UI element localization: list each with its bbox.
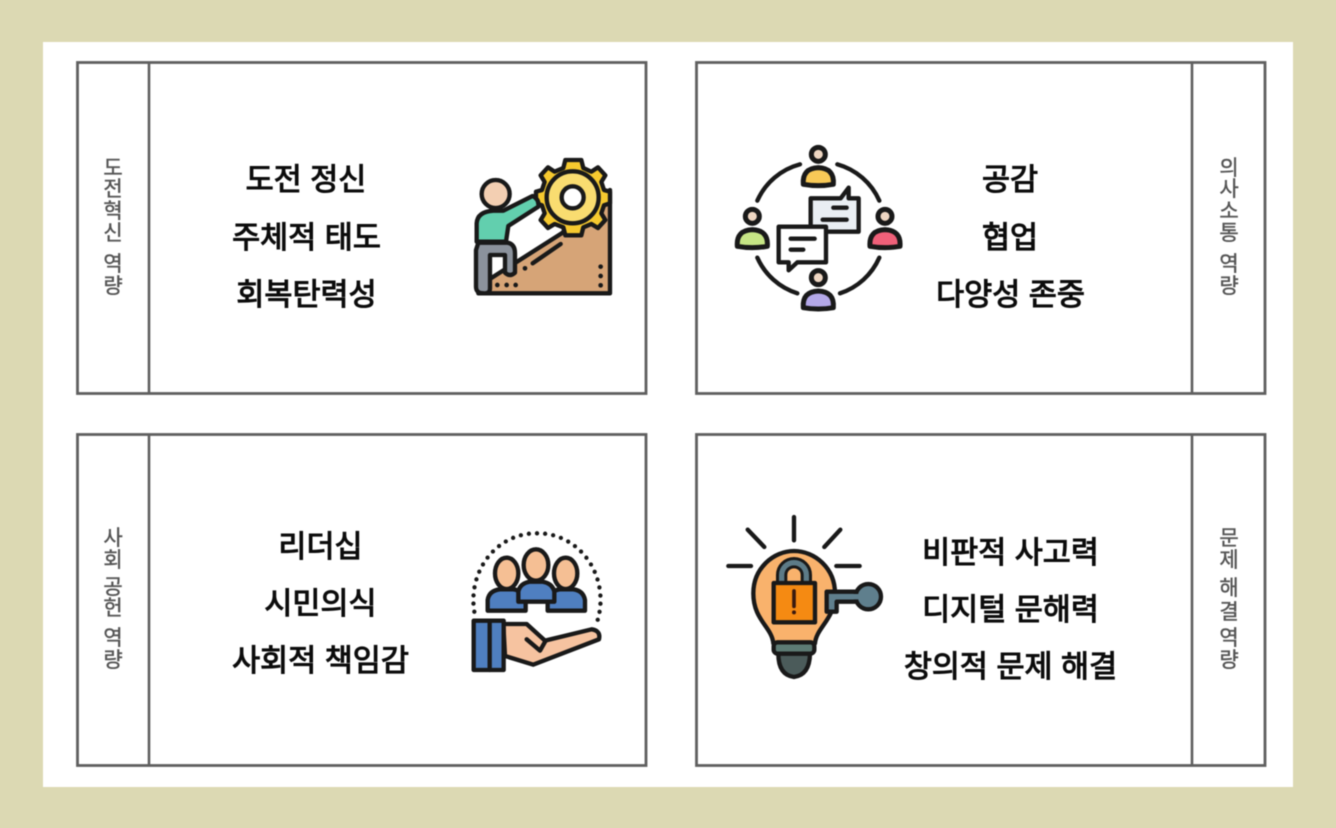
side label: 사회 공헌 역량: 량: [103, 649, 123, 672]
text block: 비판적 사고력 디지털 문해력 창의적 문제 해결: [904, 536, 1117, 684]
side label: 문제 해결 역량: 역: [1219, 627, 1239, 650]
hand: [503, 624, 599, 665]
people: [737, 147, 900, 309]
text block: 공감 협업 다양성 존중: 협업: [982, 221, 1038, 255]
text block: 리더십 시민의식 사회적 책임감: [232, 530, 409, 678]
side label: 문제 해결 역량: 해: [1219, 577, 1239, 600]
side label: 도전혁신 역량: 전: [103, 178, 123, 201]
side label: 의사소통 역량: 사: [1219, 178, 1239, 201]
side label: 의사소통 역량: 소: [1219, 200, 1239, 223]
text block: 도전 정신 주체적 태도 회복탄력성: 주체적 태도: [232, 221, 381, 255]
lock body: [774, 583, 815, 622]
side label: 사회 공헌 역량: 회: [103, 549, 123, 572]
side label: 사회 공헌 역량: 헌: [103, 597, 123, 620]
side label: 의사소통 역량: 의: [1219, 157, 1239, 180]
text block: 도전 정신 주체적 태도 회복탄력성: [232, 163, 381, 312]
side label: 문제 해결 역량: 제: [1219, 549, 1239, 572]
gear: [536, 160, 610, 235]
text block: 리더십 시민의식 사회적 책임감: 리더십: [278, 530, 363, 564]
panel: 문제 해결 역량: [696, 434, 1265, 766]
back speech bubble: [811, 188, 859, 232]
icon: hand holding people: [473, 533, 601, 670]
side label: 문제 해결 역량: 문: [1219, 527, 1239, 550]
legs: [476, 243, 515, 293]
text block: 비판적 사고력 디지털 문해력 창의적 문제 해결: 비판적 사고력: [922, 536, 1099, 570]
side label: 사회 공헌 역량: 역: [103, 627, 123, 650]
front speech bubble: [779, 227, 826, 270]
cuff: [474, 621, 504, 670]
text block: 리더십 시민의식 사회적 책임감: 시민의식: [264, 587, 377, 621]
key: [827, 584, 881, 612]
icon: climber pushing gear: [476, 160, 610, 293]
side label: 도전혁신 역량: 도: [103, 157, 123, 180]
text block: 공감 협업 다양성 존중: [936, 163, 1085, 312]
side label: 사회 공헌 역량: 공: [103, 576, 123, 599]
shackle: [782, 563, 806, 585]
text block: 도전 정신 주체적 태도 회복탄력성: 회복탄력성: [236, 278, 377, 312]
side label: 의사소통 역량: 통: [1219, 222, 1239, 245]
side people: [488, 589, 526, 611]
centre person: [518, 582, 554, 602]
text block: 공감 협업 다양성 존중: 공감: [982, 163, 1038, 197]
torso and arm: [477, 196, 538, 242]
side label: 도전혁신 역량: 역: [103, 253, 123, 276]
panel: 도전혁신 역량: [78, 62, 646, 394]
side label: 도전혁신 역량: 혁: [103, 200, 123, 223]
panel: 의사소통 역량: [696, 62, 1265, 394]
side label: 문제 해결 역량: 량: [1219, 649, 1239, 672]
side label: 의사소통 역량: 량: [1219, 275, 1239, 298]
side label: 문제 해결 역량: 결: [1219, 601, 1239, 624]
text block: 공감 협업 다양성 존중: 다양성 존중: [936, 278, 1085, 312]
side label: 사회 공헌 역량: 사: [103, 527, 123, 550]
panel: 사회 공헌 역량: [78, 434, 646, 766]
text block: 비판적 사고력 디지털 문해력 창의적 문제 해결: 디지털 문해력: [922, 593, 1099, 627]
side label: 의사소통 역량: 역: [1219, 253, 1239, 276]
side label: 도전혁신 역량: 량: [103, 275, 123, 298]
side label: 도전혁신 역량: 신: [103, 222, 123, 245]
icon: light bulb with padlock and key: [728, 517, 881, 677]
text block: 도전 정신 주체적 태도 회복탄력성: 도전 정신: [246, 163, 366, 197]
text block: 리더십 시민의식 사회적 책임감: 사회적 책임감: [232, 644, 409, 678]
base: [774, 642, 814, 654]
text block: 비판적 사고력 디지털 문해력 창의적 문제 해결: 창의적 문제 해결: [904, 650, 1117, 684]
icon: people in conversation circle: [737, 147, 900, 309]
